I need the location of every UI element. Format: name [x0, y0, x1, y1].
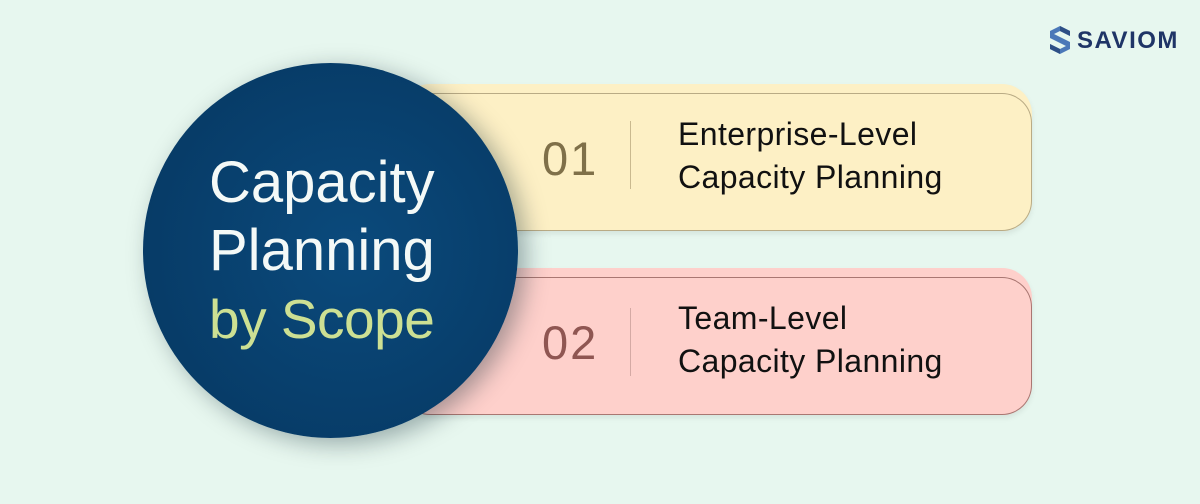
title text: Capacity	[209, 150, 435, 215]
number 02: 02	[542, 316, 598, 369]
card 1 text	[678, 116, 943, 195]
title text: Planning	[209, 218, 435, 283]
card 1: enterprise-level	[400, 84, 1032, 231]
logo	[1050, 26, 1179, 54]
logo text: SAVIOM	[1077, 27, 1179, 54]
card 2 text: Capacity Planning	[678, 343, 943, 379]
number 01: 01	[542, 132, 598, 185]
card 2 text: Team-Level	[678, 300, 847, 336]
card 2 text	[678, 300, 943, 379]
icon: logo mark	[1050, 26, 1070, 54]
title text: by Scope	[209, 288, 434, 350]
title text	[209, 150, 435, 350]
card 1 text: Enterprise-Level	[678, 116, 917, 152]
card 2: team-level	[400, 268, 1032, 415]
card 1 text: Capacity Planning	[678, 159, 943, 195]
circle: title	[143, 63, 518, 438]
